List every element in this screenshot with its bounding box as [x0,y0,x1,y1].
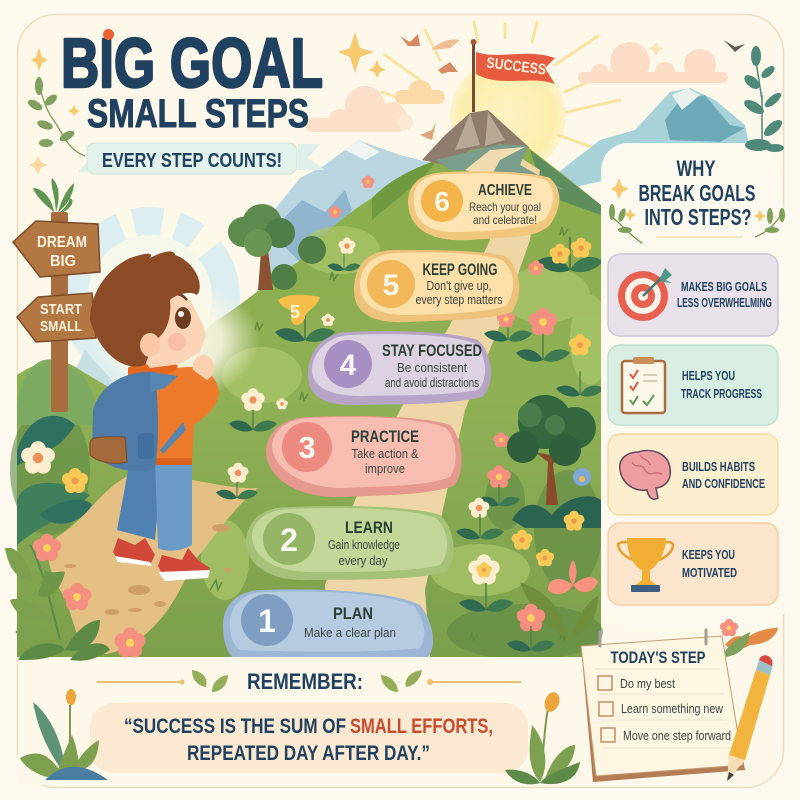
bottom strip backing [18,657,578,785]
sun [382,22,620,174]
stone 1: plan: 1 [258,603,276,639]
pencil [727,655,773,781]
left bushes [17,359,100,545]
card: habits: BUILDS HABITS [682,459,755,474]
signpost [13,178,100,412]
summit [422,39,565,190]
stone 4: stay focused: and avoid distractions [385,376,479,390]
shoes [113,538,210,581]
background sky scene [60,22,750,420]
title: SMALL STEPS [87,92,309,136]
sign: dream big: BIG [50,253,76,270]
distant mountain [60,350,150,420]
fade around boy [90,278,260,402]
dirt path [49,474,258,655]
stone 1: plan: PLAN [333,604,373,623]
stone 5: keep going [354,250,519,322]
stone 5: keep going: every step matters [416,293,502,307]
stone 3: practice: improve [365,462,405,476]
panel heading: INTO STEPS? [644,204,752,230]
tree left [228,204,326,290]
ear [140,333,160,357]
rock mountain [422,110,565,190]
cloud right [578,42,728,83]
stone 3: practice [266,416,462,497]
card: motivated: KEEPS YOU [682,547,735,562]
card: motivated [608,523,778,605]
panel heading sprigs [609,204,785,243]
stone 6: achieve: Reach your goal [469,200,541,214]
quote box: SMALL EFFORTS, [350,715,493,738]
stone 5: keep going: 5 [383,269,399,302]
mountain left [258,140,440,290]
head face [130,290,206,368]
card: habits [608,434,778,515]
cloud orange [395,80,445,130]
stone 2: learn: Gain knowledge [328,538,400,552]
hill flowers [216,176,604,652]
card: less overwhelming [608,254,778,336]
checklist item 1 [598,676,675,691]
flag: SUCCESS [485,54,547,79]
mountain right [555,88,750,190]
stone 2: learn: every day [338,554,388,568]
right branch [742,46,785,152]
icon: target [618,268,672,321]
stone 4: stay focused: STAY FOCUSED [382,341,482,360]
stone 4: stay focused [308,331,491,405]
rays behind boy [60,205,240,387]
checklist item 2: Learn something new [621,701,723,716]
top ridge grass [372,160,437,220]
stone 5: keep going: Don't give up, [426,279,492,293]
stone 6: achieve: and celebrate! [473,213,537,227]
plant bottom left [20,689,108,780]
notepad: TODAY'S STEP [610,648,706,667]
panel heading: WHY [676,156,716,181]
step path [325,148,540,657]
hill [10,145,610,660]
stone 6: achieve [408,171,559,240]
card: track progress [608,345,778,425]
grass tufts [210,227,568,640]
stone 6: achieve: 6 [434,186,450,217]
left sprig [26,77,85,156]
title [61,24,323,136]
sign: start small: START [40,302,82,318]
quote box: REPEATED DAY AFTER DAY.” [187,742,430,765]
stone 2: learn [246,506,454,580]
stone 2: learn: LEARN [345,518,393,537]
card: track progress: HELPS YOU [682,368,735,383]
remember heading: REMEMBER: [247,669,363,694]
jeans [117,460,192,551]
title: BIG GOAL [61,24,323,102]
remember heading [97,669,521,694]
sparkles [29,32,766,222]
stone 3: practice: 3 [298,430,316,465]
card: habits: AND CONFIDENCE [682,476,765,491]
flag [470,39,555,112]
quote box [90,703,528,773]
stone 4: stay focused: Be consistent [397,361,467,375]
stone 1: plan [223,589,433,657]
icon: brain [620,451,670,499]
card: motivated: MOTIVATED [682,565,737,580]
hoodie [128,361,219,465]
sign: dream big: DREAM [37,234,87,251]
banner [78,143,325,174]
right panel: why break goals [601,46,787,630]
sign: start small [17,293,96,342]
stone 3: practice: Take action & [352,447,419,461]
panel heading [638,156,756,230]
icon: checklist [622,357,665,413]
notepad [581,630,745,782]
eye [170,294,191,329]
stone 3: practice: PRACTICE [351,427,419,446]
stone 4: stay focused: 4 [340,349,357,382]
flower with number five: 5 [290,302,300,322]
flower behind notepad [720,619,778,657]
flower with number five [278,295,320,325]
cloud left [305,86,406,132]
stone 2: learn: 2 [280,522,298,558]
stone 5: keep going: KEEP GOING [422,260,498,279]
plant bottom center [505,690,580,784]
checklist item 3: Move one step forward [623,728,731,743]
icon: trophy [618,538,673,592]
plant on post [33,178,74,214]
quote box: “SUCCESS IS THE SUM OF [124,715,346,738]
stone 6: achieve: ACHIEVE [478,182,532,199]
backpack [90,372,186,471]
boy [90,252,219,581]
stone 1: plan: Make a clear plan [304,625,396,640]
bottom left flowers [5,534,146,661]
tree right [507,395,601,528]
hair [90,252,200,367]
hand [192,355,214,380]
sign: dream big [13,221,100,277]
checklist item 1: Do my best [620,676,675,691]
banner: EVERY STEP COUNTS! [102,150,282,172]
birds [400,34,745,140]
grass patches [201,226,610,600]
sign: start small: SMALL [40,319,82,335]
